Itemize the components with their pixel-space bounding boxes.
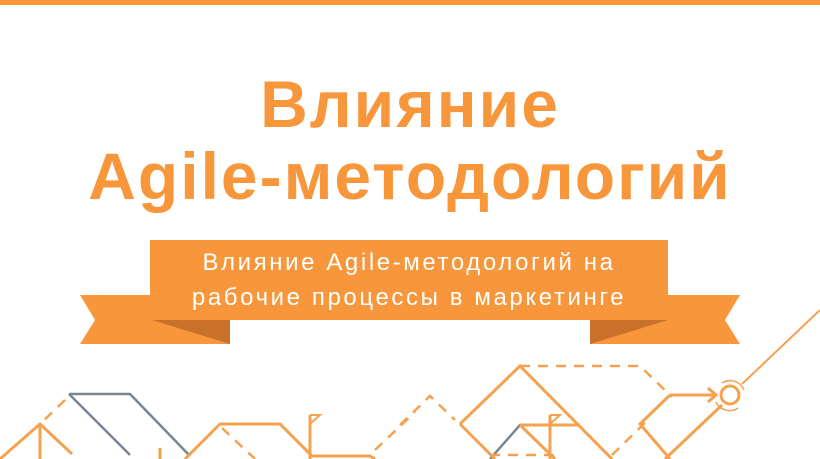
ribbon subtitle [192, 249, 626, 311]
ribbon subtitle: рабочие процессы в маркетинге [192, 284, 626, 311]
title: Влияние [260, 67, 560, 141]
title [88, 67, 732, 213]
title: Agile-методологий [88, 139, 732, 213]
ribbon subtitle: Влияние Agile-методологий на [202, 249, 616, 276]
top bar [0, 0, 820, 5]
